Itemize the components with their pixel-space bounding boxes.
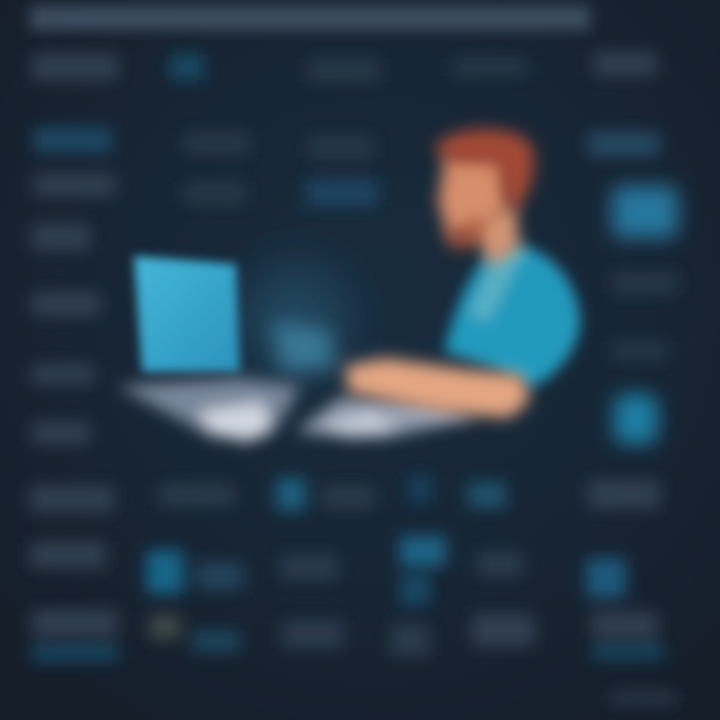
icon: right blue badge bbox=[614, 394, 658, 444]
laptop screen bbox=[134, 256, 240, 372]
panel: left column labels bbox=[32, 54, 118, 444]
person hair bbox=[434, 129, 534, 210]
person torso bbox=[444, 244, 580, 388]
person face bbox=[438, 152, 510, 238]
panel: bottom rows of labels bbox=[30, 476, 676, 704]
person beard bbox=[444, 216, 486, 252]
icon: right blue square bbox=[612, 186, 678, 238]
panel: top column labels bbox=[170, 52, 678, 360]
illustration: person at laptop bbox=[118, 129, 580, 442]
person neck bbox=[470, 205, 520, 268]
person arm and hand bbox=[345, 358, 530, 418]
screen glow bbox=[245, 265, 345, 375]
laptop base bbox=[118, 378, 478, 442]
secondary glowing screen bbox=[272, 322, 336, 372]
title bar bbox=[30, 6, 590, 30]
